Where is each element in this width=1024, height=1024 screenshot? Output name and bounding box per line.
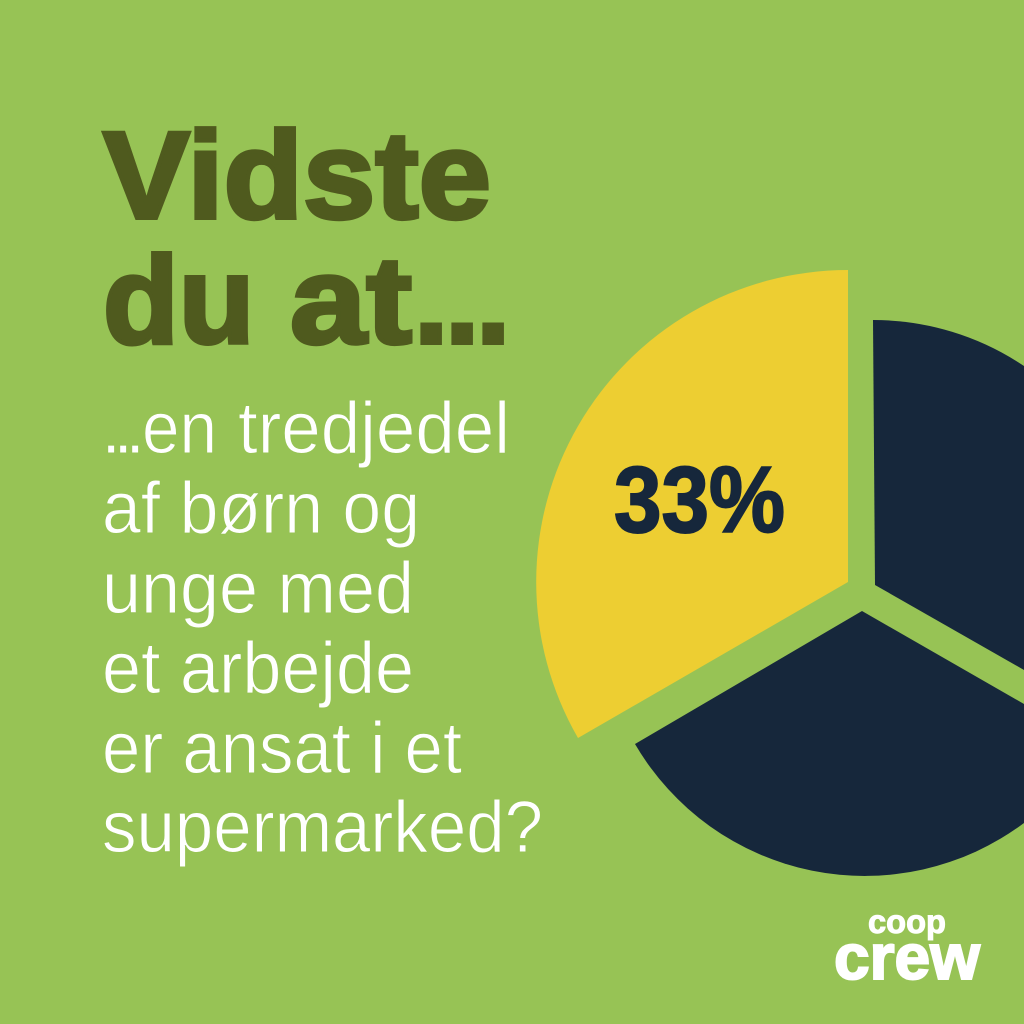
logo: coop crew: crew <box>834 921 980 993</box>
pie slice: navy upper right <box>873 320 1024 670</box>
title: du <box>103 232 254 370</box>
body text: ... <box>101 388 145 469</box>
body text: en <box>142 388 217 469</box>
body text: af børn og <box>102 468 420 549</box>
body text: tredjedel <box>238 388 510 469</box>
title: Vidste <box>103 107 491 245</box>
pie slice: navy bottom <box>635 611 1024 876</box>
pie slice: yellow 33% <box>536 270 848 738</box>
title: at <box>290 232 412 370</box>
logo: coop crew: coop <box>868 903 946 940</box>
percentage label: 33% <box>614 447 785 552</box>
body text: et arbejde <box>102 628 414 709</box>
title <box>103 107 510 370</box>
body text: supermarked? <box>102 787 543 868</box>
body text <box>101 388 543 868</box>
pie chart <box>536 270 1024 876</box>
body text: er ansat i et <box>102 708 462 789</box>
body text: unge med <box>102 548 414 629</box>
title: ... <box>414 232 510 370</box>
